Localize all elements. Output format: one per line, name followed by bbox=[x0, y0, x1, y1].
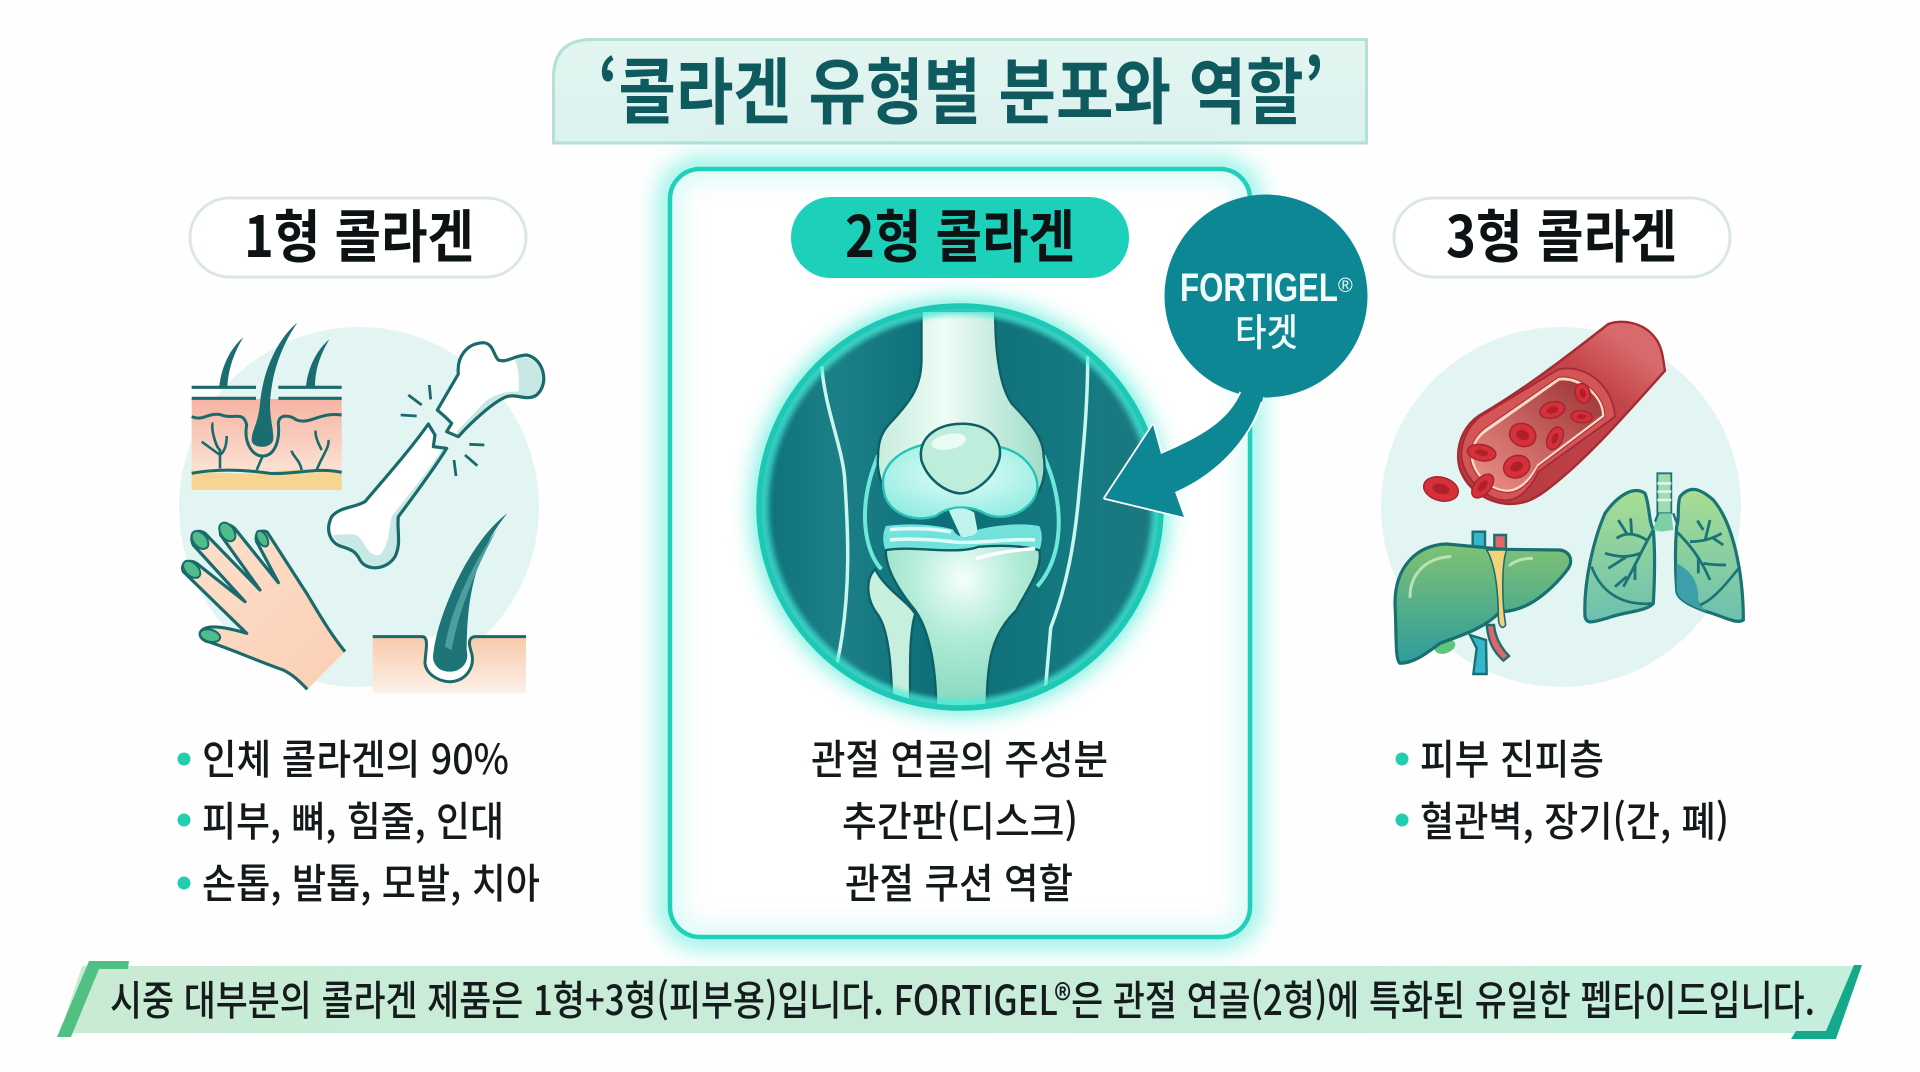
badge: FORTIGEL target: FORTIGEL bbox=[1180, 266, 1338, 310]
panel frame with glow bbox=[670, 169, 1250, 937]
badge: FORTIGEL target: ® bbox=[1338, 275, 1353, 297]
icon: liver bbox=[1395, 532, 1571, 674]
icon: lungs bbox=[1585, 473, 1743, 622]
illustration: glowing knee joint bbox=[754, 301, 1168, 713]
bullet list: type 3 bbox=[1396, 726, 1729, 848]
text block: type 2: 추간판(디스크) bbox=[842, 788, 1078, 848]
meniscus and ligament bbox=[883, 508, 1042, 551]
title: ‘콜라겐 유형별 분포와 역할’ bbox=[598, 34, 1324, 139]
text block: type 2: 관절 연골의 주성분 bbox=[811, 726, 1108, 786]
text block: type 2 bbox=[811, 726, 1108, 910]
icon cluster: vessel, liver, lungs bbox=[1381, 322, 1743, 687]
icon: blood vessel bbox=[1421, 322, 1665, 505]
bullet list: type 3: 혈관벽, 장기(간, 폐) bbox=[1420, 788, 1729, 848]
fibula bone bbox=[868, 569, 915, 710]
bullet list: type 1 bbox=[178, 726, 540, 910]
bullet list: type 1: 피부, 뼈, 힘줄, 인대 bbox=[202, 788, 504, 848]
condyles bbox=[883, 444, 1037, 518]
panel: type 3 collagen bbox=[1381, 192, 1743, 848]
bullet list: type 3: 피부 진피층 bbox=[1420, 726, 1604, 786]
icon: fractured bone bbox=[329, 343, 544, 568]
heading pill: type 2: 2형 콜라겐 bbox=[845, 192, 1075, 274]
right bracket bbox=[1791, 965, 1862, 1039]
heading pill: type 1: 1형 콜라겐 bbox=[244, 192, 474, 274]
kneecap bbox=[921, 424, 1000, 493]
badge: FORTIGEL target: 타겟 bbox=[1235, 302, 1298, 357]
text block: type 2: 관절 쿠션 역할 bbox=[845, 850, 1073, 910]
panel: type 2 collagen bbox=[670, 169, 1368, 937]
bullet list: type 1: 인체 콜라겐의 90% bbox=[202, 726, 509, 786]
arrow: badge to knee bbox=[1105, 370, 1268, 517]
left bracket bbox=[57, 961, 129, 1037]
icon: hand with nails bbox=[180, 520, 345, 689]
heading pill: type 3: 3형 콜라겐 bbox=[1446, 192, 1677, 274]
inner rim glow bbox=[762, 308, 1159, 706]
icon cluster: skin, bone, hand, hair bbox=[179, 323, 544, 693]
tibia bone bbox=[886, 546, 1040, 710]
badge: FORTIGEL target bbox=[1164, 194, 1368, 398]
icon: hair follicle bbox=[373, 513, 526, 693]
bullet list: type 1: 손톱, 발톱, 모발, 치아 bbox=[202, 850, 540, 910]
femur bone bbox=[878, 311, 1045, 499]
icon: skin cross-section with hair bbox=[192, 323, 342, 490]
panel: type 1 collagen bbox=[178, 192, 544, 910]
